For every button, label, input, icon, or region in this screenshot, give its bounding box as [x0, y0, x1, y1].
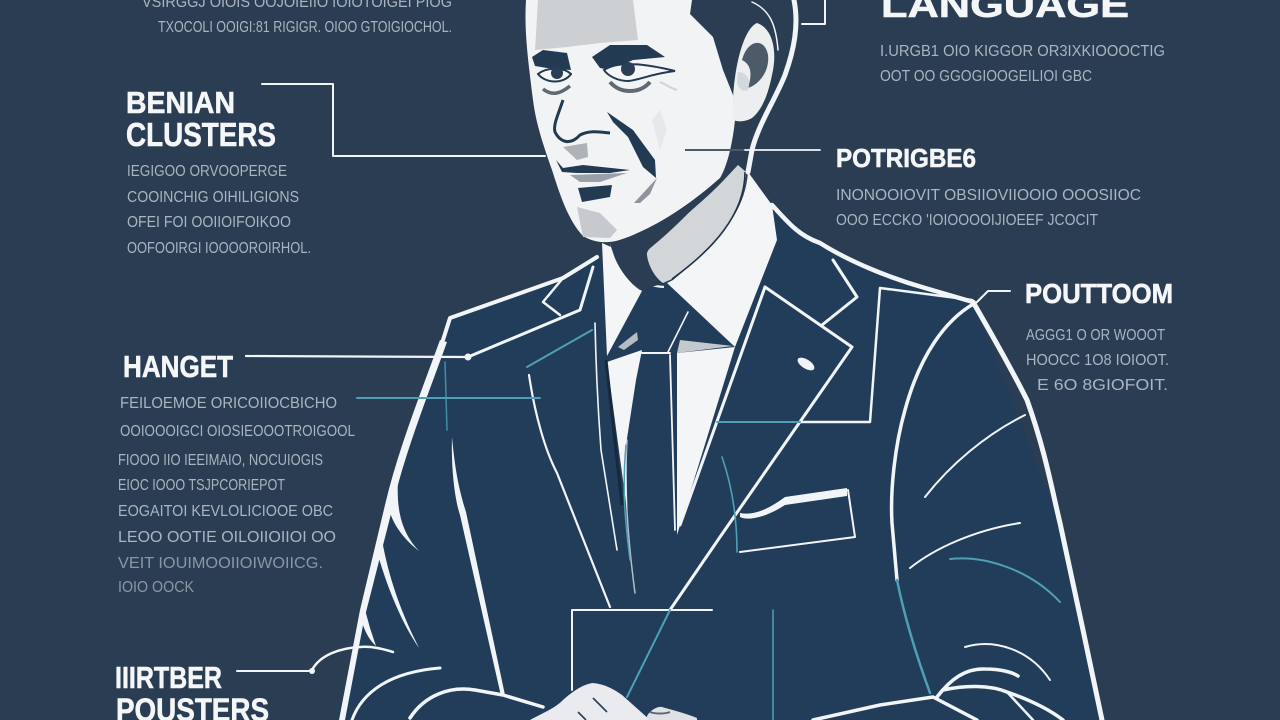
connector lines [237, 0, 1010, 674]
block: Benian Clusters: COOINCHIG OIHILIGIONS [127, 189, 299, 206]
block: Hanget: EOGAITOI KEVLOLICIOOE OBC [118, 503, 333, 520]
hair and head outline [748, 0, 796, 172]
block: Hanget: VEIT IOUIMOOIIOIWOIICG. [118, 555, 323, 572]
block: Language [880, 0, 1165, 85]
block: Hirtber Pousters [115, 660, 269, 720]
block: Hanget: OOIOOOIGCI OIOSIEOOOTROIGOOL [120, 423, 355, 440]
block: Language: OOT OO GGOGIOOGEILIOI GBC [880, 68, 1092, 85]
breast pocket [722, 457, 855, 552]
block: Potrigbe6: INONOOIOVIT OBSIIOVIIOOIO OOOSIIOC [836, 187, 1141, 204]
block: Hanget: EIOC IOOO TSJPCORIEPOT [118, 477, 285, 494]
block: Benian Clusters [126, 85, 311, 257]
block: Pouttoom: HOOCC 1O8 IOIOOT. [1026, 352, 1169, 369]
mouth [556, 160, 630, 173]
block: Benian Clusters: IEGIGOO ORVOOPERGE [127, 163, 287, 180]
block: Hanget: HANGET [123, 349, 233, 384]
block: Language: I.URGB1 OIO KIGGOR OR3IXKIOOOCTIG [880, 43, 1165, 60]
block: Potrigbe6 [836, 143, 1141, 229]
eyes [538, 69, 571, 82]
figure: man in suit [312, 0, 1102, 720]
ear [733, 23, 774, 121]
block: Benian Clusters: CLUSTERS [126, 116, 276, 153]
text block: top left: TXOCOLI OOIGI:81 RIGIGR. OIOO GTOIGIOCHOL. [158, 19, 452, 36]
block: Pouttoom: POUTTOOM [1025, 278, 1173, 309]
head and face [525, 0, 735, 290]
suit left shoulder and sleeve outline [312, 257, 597, 720]
shirt and collar [602, 165, 777, 560]
block: Hanget: FIOOO IIO IEEIMAIO, NOCUIOGIS [118, 452, 323, 469]
block: Hirtber Pousters: IIIRTBER [115, 660, 222, 695]
icon: lapel buttonhole [796, 355, 816, 373]
jaw shadow [610, 178, 720, 290]
text block: top left [142, 0, 452, 36]
suit right shoulder and sleeve outline [772, 205, 1102, 720]
block: Benian Clusters: OOFOOIRGI IOOOOROIRHOL. [127, 240, 311, 257]
suit body fill [338, 205, 1102, 720]
nasolabial fold [607, 112, 656, 178]
block: Pouttoom: AGGG1 O OR WOOOT [1026, 327, 1165, 344]
block: Hanget: FEILOEMOE ORICOIIOCBICHO [120, 395, 337, 412]
block: Potrigbe6: POTRIGBE6 [836, 143, 976, 173]
clasped hands [530, 683, 697, 720]
nose [555, 100, 610, 142]
suit left lapel and inner lines [445, 267, 712, 696]
block: Potrigbe6: OOO ECCKO 'IOIOOOOIJIOEEF JCOCIT [836, 212, 1098, 229]
eyebrows [532, 50, 571, 70]
block: Hanget [118, 349, 355, 596]
block: Hanget: IOIO OOCK [118, 579, 195, 596]
suit right lapel, chest box and pocket [627, 260, 972, 720]
block: Hanget: LEOO OOTIE OILOIIOIIOI OO [118, 529, 336, 546]
block: Benian Clusters: BENIAN [126, 85, 235, 120]
block: Benian Clusters: OFEI FOI OOIIOIFOIKOO [127, 214, 291, 231]
block: Pouttoom [1025, 278, 1173, 394]
block: Pouttoom: E 6O 8GIOFOIT. [1037, 377, 1168, 394]
